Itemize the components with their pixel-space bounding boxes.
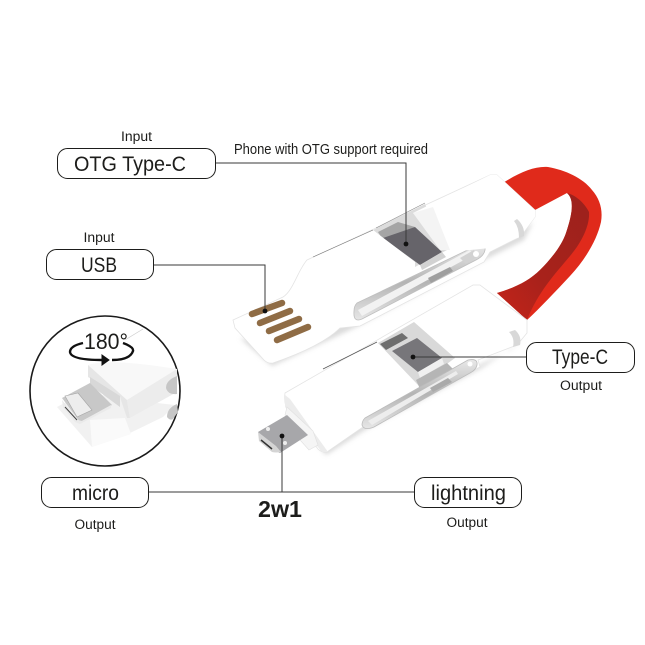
top white cap xyxy=(413,175,535,252)
lower plate xyxy=(57,392,175,447)
box: lightning xyxy=(414,478,522,508)
box: Type-C: Type-C xyxy=(552,346,608,369)
red strap xyxy=(497,167,602,320)
flange xyxy=(90,377,120,407)
box: micro: micro xyxy=(72,482,119,505)
box: Type-C xyxy=(526,342,634,372)
box: OTG Type-C: OTG Type-C xyxy=(74,153,186,176)
label: Input USB: Input xyxy=(84,230,115,245)
top connector body with USB plate xyxy=(233,175,535,363)
socket recess top xyxy=(373,204,447,267)
box: micro xyxy=(42,478,148,508)
micro plug xyxy=(258,415,308,453)
label: Output lightning: Output xyxy=(446,515,488,530)
hinges xyxy=(166,376,177,394)
soft shadows under connectors xyxy=(240,222,533,455)
callout line: micro and lightning xyxy=(149,434,414,492)
bottom connector body xyxy=(258,285,527,453)
micro plug neck xyxy=(285,407,318,450)
front white slider edge xyxy=(330,230,415,302)
callout line: OTG Type-C xyxy=(216,163,408,246)
box: OTG Type-C xyxy=(58,148,216,178)
metal slider bottom xyxy=(362,360,477,429)
socket recess bottom xyxy=(378,322,455,385)
lightning plug xyxy=(62,383,112,422)
rotation arrow xyxy=(70,343,133,365)
label: Input OTG: Input xyxy=(121,129,152,144)
inset: rotating lightning plug xyxy=(30,316,180,466)
USB contacts xyxy=(252,303,308,340)
180 degrees: 180° xyxy=(84,329,128,354)
white housing xyxy=(88,362,177,418)
label: 2w1: 2w1 xyxy=(258,496,302,522)
box: USB: USB xyxy=(81,254,117,277)
label: Output Type-C: Output xyxy=(560,378,602,393)
callout line: USB xyxy=(154,265,267,313)
metal slider top xyxy=(354,245,485,320)
callout line: Type-C xyxy=(411,355,526,359)
box: USB xyxy=(46,250,154,280)
box: lightning: lightning xyxy=(431,482,506,505)
note: OTG support: Phone with OTG support required xyxy=(234,142,428,158)
label: Output micro: Output xyxy=(74,517,116,532)
